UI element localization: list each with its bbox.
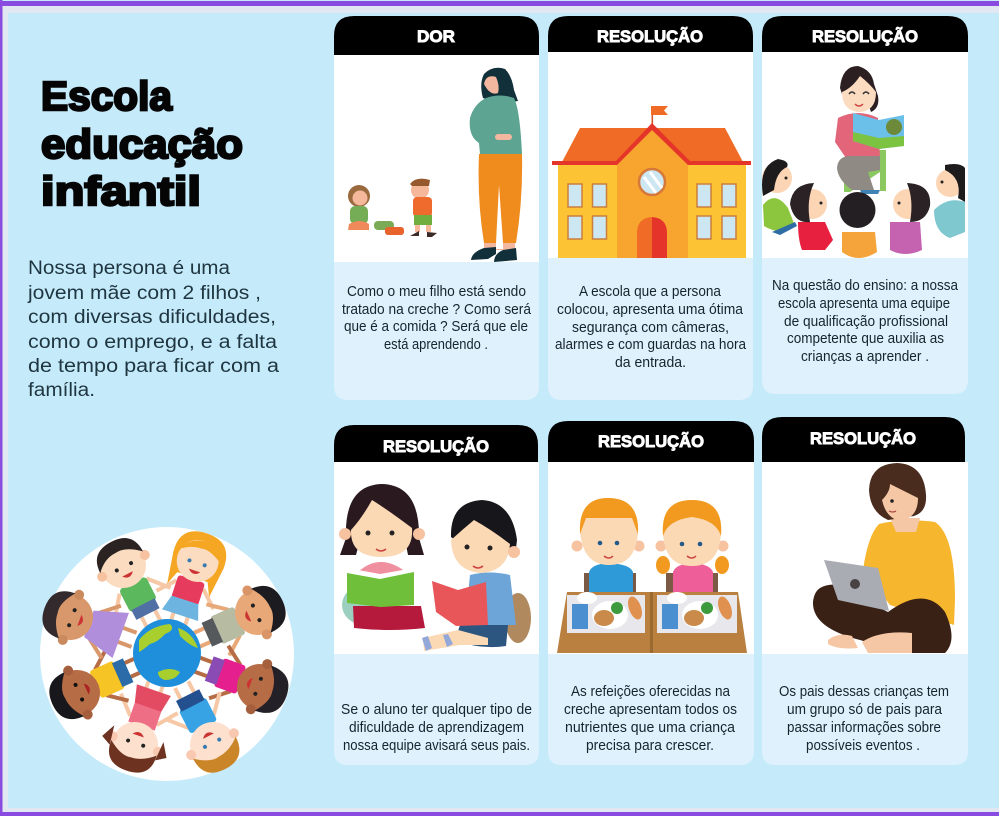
persona description: família. [28, 380, 95, 401]
header: DOR [417, 27, 455, 46]
toy cars [374, 221, 404, 235]
text: colocou, apresenta uma ótima [557, 301, 744, 318]
child green [762, 159, 797, 235]
header [548, 421, 754, 462]
child 8 [35, 581, 144, 668]
card: grupo de pais [762, 417, 968, 765]
boy [410, 179, 437, 237]
text: Na questão do ensino: a nossa [772, 277, 959, 294]
text: dificuldade de aprendizagem [349, 719, 524, 736]
text: nossa equipe avisará seus pais. [343, 737, 530, 754]
title: infantil [41, 168, 201, 214]
text: escola apresenta uma equipe [778, 295, 950, 312]
header: RESOLUÇÃO [383, 436, 489, 456]
persona description: jovem mãe com 2 filhos , [27, 283, 261, 304]
child orange [840, 192, 877, 258]
child 5 [155, 671, 252, 783]
text: competente que auxilia as [787, 330, 944, 347]
header [548, 16, 753, 52]
illustration: children eating at school [557, 498, 747, 653]
persona description: Nossa persona é uma [28, 258, 230, 279]
card: ensino [762, 16, 968, 394]
text: crianças a aprender . [801, 348, 929, 365]
card: dor [334, 16, 539, 400]
text: Se o aluno ter qualquer tipo de [341, 701, 532, 718]
header: RESOLUÇÃO [812, 26, 918, 46]
text: precisa para crescer. [586, 737, 714, 754]
child 3 [184, 575, 294, 666]
text: A escola que a persona [579, 283, 722, 300]
header: RESOLUÇÃO [597, 26, 703, 46]
text [341, 701, 532, 754]
text: está aprendendo . [384, 336, 488, 353]
text: segurança com câmeras, [572, 319, 729, 336]
text: passar informações sobre [787, 719, 941, 736]
illustration: children around the globe [35, 524, 296, 783]
text: um grupo só de pais para [787, 701, 943, 718]
text: possíveis eventos . [806, 737, 920, 754]
text [564, 683, 737, 754]
child 2 [148, 524, 235, 636]
header: RESOLUÇÃO [598, 431, 704, 451]
child 1 [84, 527, 182, 639]
text [555, 283, 747, 371]
persona description [27, 258, 279, 401]
child purple [890, 183, 930, 254]
child 4 [186, 636, 296, 724]
card: escola [548, 16, 753, 400]
illustration: children reading [339, 484, 531, 651]
child 7 [41, 639, 151, 730]
girl [348, 185, 370, 230]
text [779, 683, 949, 754]
text: que é a comida ? Será que ele [344, 318, 528, 335]
header [334, 425, 538, 462]
text: da entrada. [615, 354, 686, 371]
text: de qualificação profissional [784, 313, 948, 330]
persona description: com diversas dificuldades, [28, 307, 276, 328]
card: aprendizagem [334, 425, 539, 765]
child red [790, 183, 833, 250]
text: Como o meu filho está sendo [347, 283, 526, 300]
title [41, 73, 243, 214]
header [334, 16, 539, 55]
text: tratado na creche ? Como será [342, 301, 532, 318]
header: RESOLUÇÃO [810, 428, 916, 448]
text: creche apresentam todos os [564, 701, 737, 718]
header [762, 417, 965, 462]
illustration: woman with laptop [813, 463, 955, 653]
text [342, 283, 532, 353]
card: refeições [548, 421, 754, 765]
illustration: teacher reading to children [762, 66, 965, 258]
text [772, 277, 959, 365]
globe [133, 619, 201, 687]
text: As refeições oferecidas na [571, 683, 731, 700]
persona description: como o emprego, e a falta [28, 332, 277, 353]
title: educação [41, 121, 243, 167]
illustration: school building [552, 106, 751, 258]
persona description: de tempo para ficar com a [28, 356, 279, 377]
header [762, 16, 968, 52]
text: Os pais dessas crianças tem [779, 683, 949, 700]
child 6 [94, 670, 189, 782]
text: alarmes e com guardas na hora [555, 336, 747, 353]
title: Escola [41, 73, 173, 119]
child blue [934, 164, 965, 238]
illustration: worried mother and children [348, 68, 522, 262]
text: nutrientes que uma criança [565, 719, 736, 736]
